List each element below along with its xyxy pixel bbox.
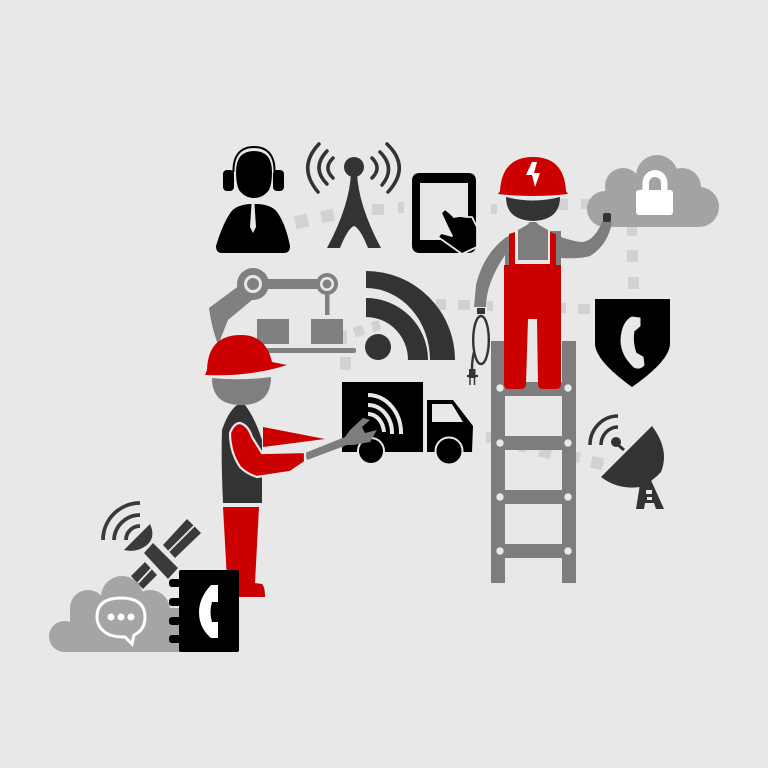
icon: delivery truck with wifi — [342, 382, 473, 464]
icon: shield with phone — [595, 299, 670, 387]
cable with plug — [467, 316, 489, 385]
hard hat with lightning bolt — [498, 157, 568, 196]
icon: satellite — [103, 503, 201, 589]
icon: cloud with padlock — [587, 155, 719, 227]
icon: large wifi signal — [365, 271, 455, 360]
icon: robot arm with conveyor — [209, 268, 356, 353]
icon: satellite dish — [590, 416, 664, 509]
red sleeve arm — [230, 423, 305, 477]
red boot and leg — [223, 507, 265, 597]
icon: phone book — [169, 570, 239, 652]
icon: support agent with headset — [216, 147, 290, 253]
dotted connector lines — [294, 199, 639, 470]
figure: worker on ladder — [467, 157, 612, 389]
worker arms and shirt — [474, 220, 612, 307]
icon: ladder — [491, 341, 576, 583]
far arm — [263, 427, 325, 447]
dark vest — [222, 405, 262, 503]
icon: tablet with touching hand — [412, 173, 477, 254]
worker head — [212, 377, 271, 405]
figure: worker with wrench — [205, 335, 377, 597]
icon: cloud with speech bubble — [49, 576, 180, 652]
wrench — [305, 418, 377, 460]
hard hat — [205, 335, 287, 375]
icon: radio tower — [308, 144, 399, 248]
worker head — [506, 197, 560, 221]
red overalls — [504, 232, 561, 389]
